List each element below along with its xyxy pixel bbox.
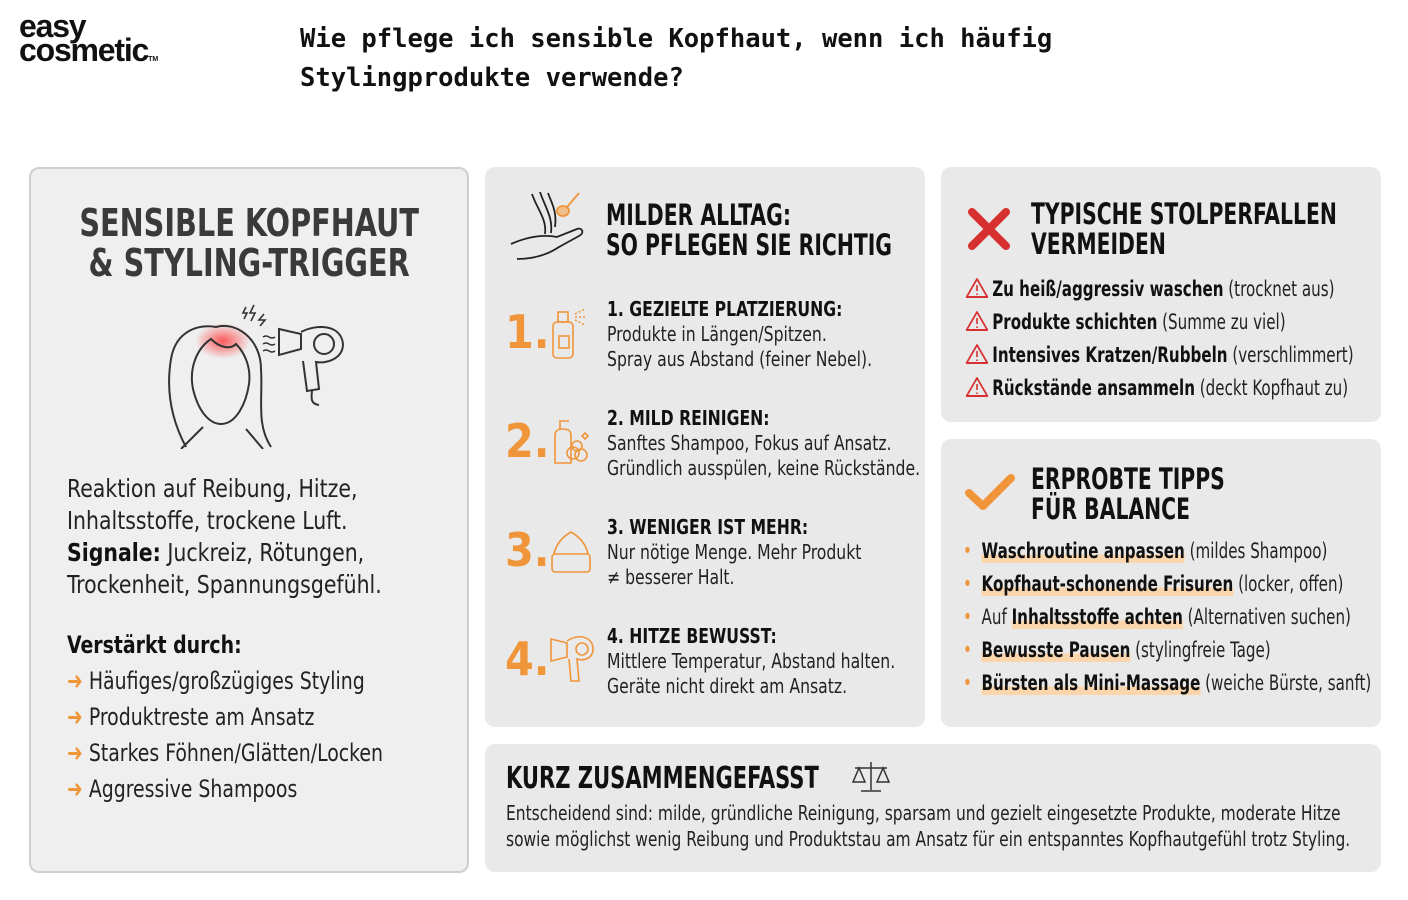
step 3: Nur nötige Menge. Mehr Produkt (607, 540, 861, 564)
step 1 (505, 297, 872, 371)
text: reaction: Reaktion auf Reibung, Hitze, (67, 474, 357, 503)
list: verstärkt durch: ➜ Häufiges/großzügiges Styling (67, 667, 365, 695)
step 4: 4. (505, 632, 550, 686)
step 1: Produkte in Längen/Spitzen. (607, 322, 827, 346)
list: tips (963, 539, 1371, 695)
title: Wie pflege ich sensible Kopfhaut, wenn ich häufig (300, 24, 1052, 54)
list: pitfalls: Zu heiß/aggressiv waschen (trocknet aus) (992, 277, 1334, 301)
heading: & STYLING-TRIGGER (88, 241, 410, 285)
heading: ERPROBTE TIPPS (1031, 462, 1225, 496)
panel: kurz zusammengefasst (485, 744, 1381, 872)
icon: hairdryer (550, 636, 594, 682)
text: reaction: Inhaltsstoffe, trockene Luft. (67, 506, 347, 535)
list: verstärkt durch (67, 631, 383, 803)
list: verstärkt durch: ➜ Aggressive Shampoos (67, 775, 297, 803)
step 2: Sanftes Shampoo, Fokus auf Ansatz. (607, 431, 892, 455)
list: verstärkt durch: ➜ Starkes Föhnen/Glätten/Locken (67, 739, 383, 767)
heading: MILDER ALLTAG: (606, 198, 791, 232)
list: tips: • Bewusste Pausen (stylingfreie Tage) (963, 638, 1271, 662)
step 1: 1. GEZIELTE PLATZIERUNG: (607, 297, 842, 321)
list: verstärkt durch: Verstärkt durch: (67, 631, 242, 659)
step 4: 4. HITZE BEWUSST: (607, 624, 777, 648)
step 2 (505, 406, 920, 480)
summary text: Entscheidend sind: milde, gründliche Reinigung, sparsam und gezielt eingesetzte Produkte, moderate Hitze (506, 801, 1341, 825)
list: verstärkt durch: ➜ Produktreste am Ansatz (67, 703, 314, 731)
icon: hand with product (510, 192, 584, 260)
list: pitfalls: Intensives Kratzen/Rubbeln (verschlimmert) (992, 343, 1354, 367)
panel: stolperfallen (941, 167, 1381, 422)
step 1: 1. (505, 305, 550, 359)
step 1: Spray aus Abstand (feiner Nebel). (607, 347, 872, 371)
heading: FÜR BALANCE (1031, 492, 1190, 526)
step 4: Geräte nicht direkt am Ansatz. (607, 674, 847, 698)
step 4: Mittlere Temperatur, Abstand halten. (607, 649, 895, 673)
list: tips: • Kopfhaut-schonende Frisuren (locker, offen) (963, 572, 1343, 596)
list: pitfalls (966, 277, 1354, 400)
logo: cosmeticTM (19, 32, 158, 68)
summary text: sowie möglichst wenig Reibung und Produktstau am Ansatz für ein entspanntes Kopfhautgefühl trotz Styling. (506, 827, 1350, 851)
logo (19, 8, 158, 68)
step 2: Gründlich ausspülen, keine Rückstände. (607, 456, 920, 480)
text: reaction: Trockenheit, Spannungsgefühl. (67, 570, 382, 599)
icon: spray (552, 308, 585, 359)
heading (1031, 197, 1337, 261)
text: reaction (66, 474, 382, 599)
step 3: ≠ besserer Halt. (607, 565, 735, 589)
heading: VERMEIDEN (1031, 227, 1166, 261)
panel: left sensible kopfhaut (29, 167, 469, 873)
list: tips: • Auf Inhaltsstoffe achten (Alternativen suchen) (963, 605, 1351, 629)
heading: SO PFLEGEN SIE RICHTIG (606, 228, 892, 262)
summary text (506, 801, 1350, 851)
step 2: 2. (505, 414, 550, 468)
list: tips: • Waschroutine anpassen (mildes Shampoo) (963, 539, 1327, 563)
heading: SENSIBLE KOPFHAUT (79, 201, 419, 245)
icon: head with hairdryer (168, 304, 344, 449)
list: pitfalls: Rückstände ansammeln (deckt Kopfhaut zu) (992, 376, 1348, 400)
list: pitfalls: Produkte schichten (Summe zu viel) (992, 310, 1286, 334)
step 3 (505, 515, 862, 589)
step 2: 2. MILD REINIGEN: (607, 406, 770, 430)
icon: scales (852, 762, 890, 792)
icon: jar (551, 531, 591, 573)
heading (606, 198, 892, 262)
logo: easy (19, 8, 85, 44)
step 3: 3. WENIGER IST MEHR: (607, 515, 808, 539)
title (300, 24, 1052, 93)
panel: milder alltag (485, 167, 925, 727)
step 4 (505, 624, 895, 698)
list: tips: • Bürsten als Mini-Massage (weiche Bürste, sanft) (963, 671, 1371, 695)
heading (1031, 462, 1225, 526)
icon: shampoo (554, 420, 589, 464)
text: reaction: Signale: Juckreiz, Rötungen, (67, 538, 364, 567)
heading (79, 201, 419, 285)
heading: TYPISCHE STOLPERFALLEN (1031, 197, 1337, 231)
icon: check (965, 474, 1015, 510)
step 3: 3. (505, 523, 550, 577)
icon: red x (968, 208, 1010, 250)
heading: KURZ ZUSAMMENGEFASST (506, 761, 819, 796)
panel: erprobte tipps (941, 439, 1381, 727)
title: Stylingprodukte verwende? (300, 63, 684, 93)
